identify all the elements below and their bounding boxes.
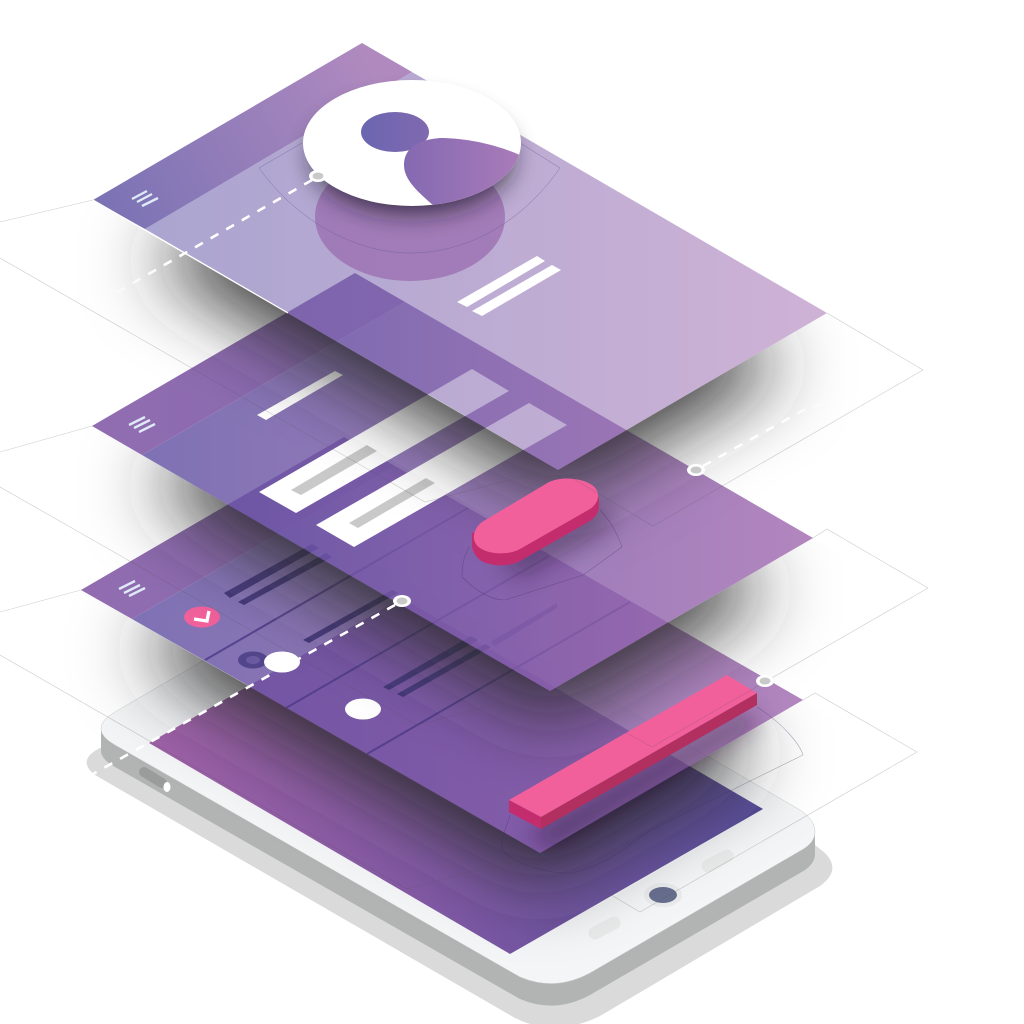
node top (309, 170, 327, 182)
pill shadow (500, 505, 612, 578)
layer 3 body (132, 466, 803, 853)
side switch (144, 772, 170, 792)
phone ground shadow (87, 748, 832, 1024)
layer 3 header strip (81, 437, 395, 619)
white title bar (257, 371, 343, 420)
white radio dot upper (264, 652, 300, 672)
curved guide on layer 2 (462, 510, 622, 600)
shadow of layer 1 (148, 127, 787, 500)
phone side wall (101, 729, 815, 1006)
row text bars (224, 544, 491, 697)
pink check badge (184, 606, 220, 628)
pill top (474, 478, 598, 553)
menu icon layer 1 (132, 191, 158, 206)
layer 2: cards screen (92, 273, 813, 691)
avatar torso (404, 138, 519, 205)
card 2 (316, 403, 567, 547)
dashed connector right (703, 402, 848, 466)
pink bar on layer 3 (509, 675, 762, 848)
pill side (472, 497, 599, 565)
dashed connector lower (93, 605, 395, 774)
bar shadow (530, 712, 762, 848)
avatar disc shadow (311, 100, 513, 214)
faint row bar (490, 603, 557, 646)
menu icon layer 3 (119, 581, 145, 596)
shadow outline of layer 3 (0, 590, 917, 912)
menu icon layer 2 (129, 417, 155, 432)
avatar head (361, 112, 429, 152)
curved guide on layer 3 (502, 707, 803, 873)
home button (644, 883, 682, 907)
phone (101, 567, 815, 1006)
phone soft key right (708, 856, 727, 866)
bar left side (509, 800, 541, 829)
curved guide on layer 1 (259, 143, 560, 253)
shadow of layer 2 (147, 357, 773, 721)
layer 3: list screen (81, 437, 803, 873)
avatar disc (303, 80, 521, 206)
node lower (393, 595, 411, 607)
white radio dot lower (345, 698, 381, 720)
layer 1 body (145, 72, 827, 470)
dashed connector top (100, 180, 312, 302)
node far right (756, 675, 774, 687)
shadow outline of layer 2 (0, 426, 928, 747)
shadow outline of layer 1 (0, 200, 923, 526)
layer 1 header strip (93, 43, 412, 229)
node right (687, 464, 705, 476)
shadow of layer 3 (136, 521, 763, 883)
white text bars (457, 256, 561, 316)
phone screen (149, 598, 763, 954)
bar top (509, 675, 757, 817)
avatar base disc (315, 153, 505, 281)
card 1 (259, 369, 509, 513)
row divider lines (205, 508, 630, 754)
layer 2 header strip (92, 273, 405, 455)
bar right side (541, 693, 757, 829)
layer 2 body (142, 302, 813, 691)
pink pill button (472, 478, 612, 578)
phone front face (101, 567, 815, 984)
dark radio dot (238, 652, 268, 668)
edge highlight (93, 200, 288, 313)
layer 1: profile screen (93, 43, 827, 470)
phone soft key left (595, 923, 614, 933)
